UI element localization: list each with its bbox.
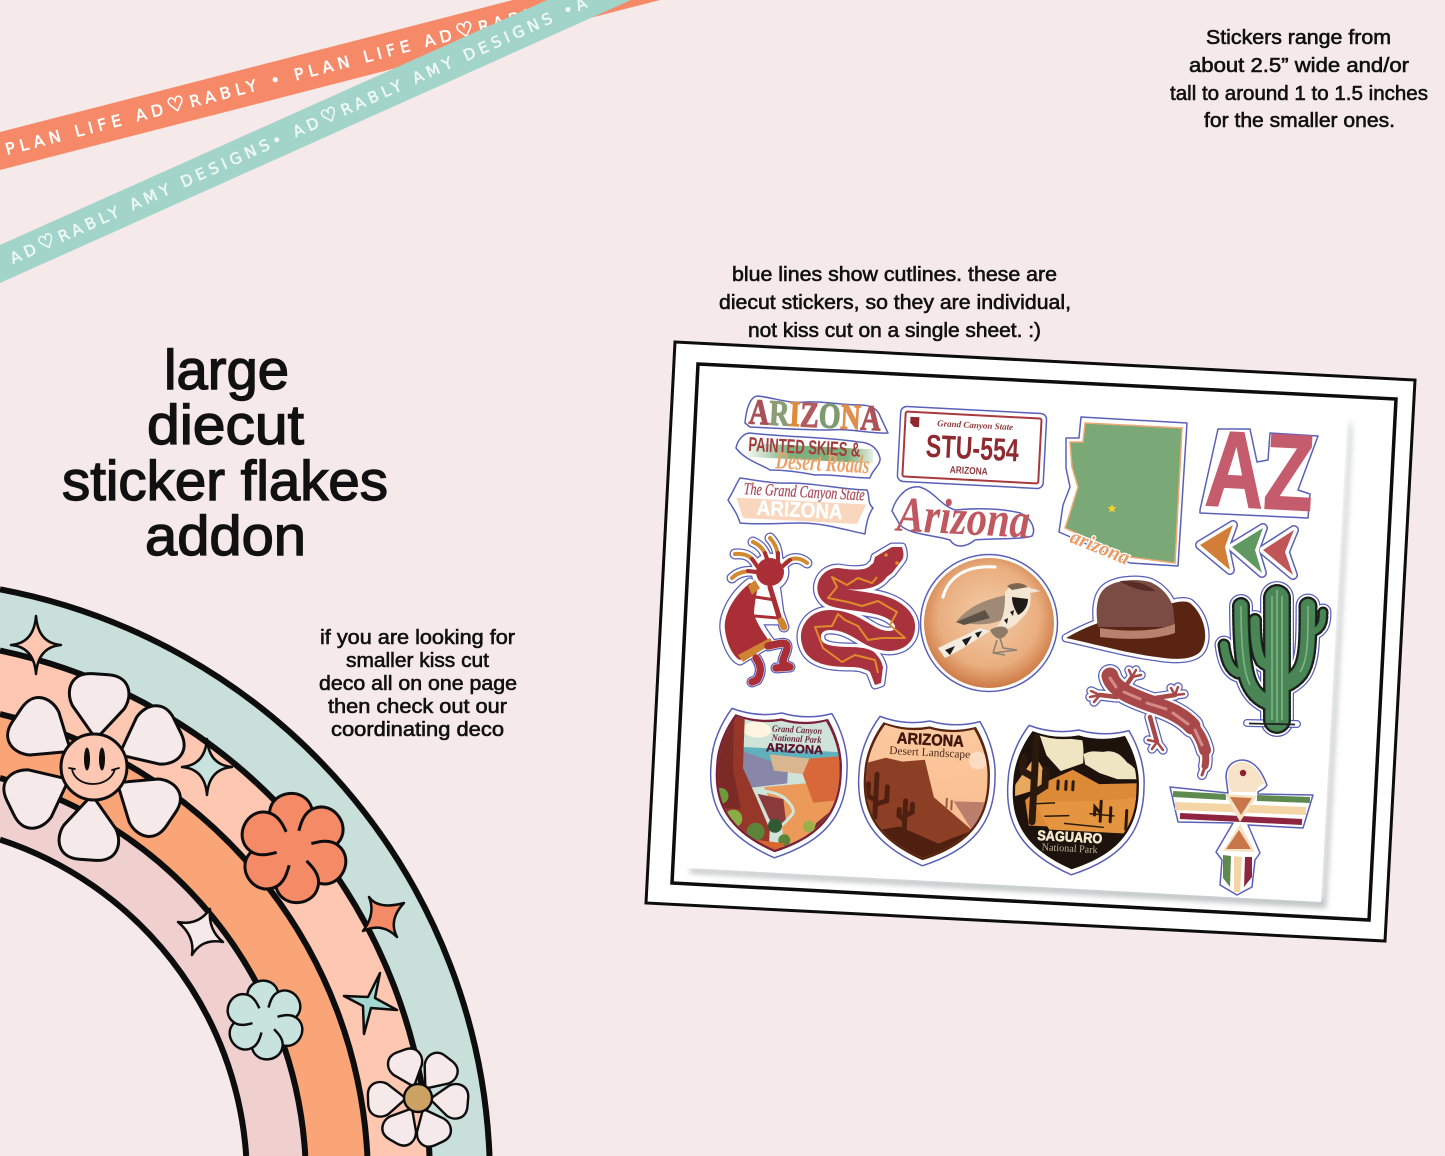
icon: smiley daisy bbox=[0, 672, 191, 862]
icon: peach sparkle bbox=[11, 616, 61, 674]
icon: white star bbox=[178, 909, 223, 955]
sticker: Saguaro National Park shield: National Park bbox=[1041, 842, 1099, 856]
title: diecut bbox=[147, 393, 304, 456]
sticker: thunderbird bbox=[1170, 760, 1313, 895]
title bbox=[62, 338, 388, 567]
sticker: saguaro cactus bbox=[1224, 590, 1323, 724]
sticker: gecko bbox=[1090, 670, 1206, 775]
text: cutlines note bbox=[719, 263, 1071, 342]
icon: bird bbox=[938, 583, 1041, 658]
text: sticker size note bbox=[1170, 26, 1428, 132]
sticker: painted skies and desert roads bbox=[736, 433, 880, 479]
sticker: Grand Canyon shield: Grand Canyon bbox=[772, 725, 822, 737]
sticker: three arrows bbox=[1200, 525, 1294, 575]
sticker: Saguaro National Park shield: SAGUARO bbox=[1037, 827, 1103, 846]
title: sticker flakes bbox=[62, 449, 388, 512]
sticker: license plate bbox=[897, 406, 1047, 489]
icon: small daisy bbox=[367, 1045, 469, 1151]
sticker: license plate: Grand Canyon State bbox=[937, 418, 1013, 432]
sticker: painted skies and desert roads: Desert Roads bbox=[774, 447, 870, 479]
sticker: state of Arizona map: arizona bbox=[1067, 524, 1133, 570]
text: sticker size note: tall to around 1 to 1.5 inches bbox=[1170, 82, 1428, 105]
sticker: the grand canyon state banner: The Grand Canyon State bbox=[743, 479, 865, 504]
sticker: Grand Canyon shield bbox=[704, 707, 852, 864]
text: coordinating deco note: then check out our bbox=[328, 696, 507, 718]
text: cutlines note: diecut stickers, so they are individual, bbox=[719, 291, 1071, 314]
sticker: license plate: ARIZONA bbox=[949, 465, 988, 478]
sticker: rattlesnake bbox=[811, 547, 905, 685]
text: coordinating deco note: deco all on one page bbox=[319, 673, 517, 695]
icon: teal sparkle bbox=[182, 739, 232, 795]
icon: coral flower bbox=[235, 792, 353, 904]
text: coordinating deco note bbox=[319, 627, 517, 741]
sticker: Saguaro National Park shield bbox=[1006, 724, 1145, 876]
sticker: cowboy hat bbox=[1066, 580, 1205, 659]
sticker: Grand Canyon shield: ARIZONA bbox=[766, 740, 824, 757]
text: cutlines note: not kiss cut on a single sheet. :) bbox=[748, 319, 1041, 342]
sticker: meadowlark badge bbox=[920, 554, 1058, 692]
text: sticker size note: about 2.5” wide and/or bbox=[1189, 54, 1409, 77]
text: sticker size note: for the smaller ones. bbox=[1204, 109, 1395, 132]
ribbon: plan life adorably: PLAN LIFE AD♡RABLY • PLAN LIFE AD♡RABLY bbox=[2, 0, 548, 160]
sticker: the grand canyon state banner: ARIZONA bbox=[756, 497, 843, 524]
icon: coral star bbox=[363, 897, 404, 937]
sticker: Grand Canyon shield: National Park bbox=[770, 733, 822, 746]
sticker: Arizona desert landscape shield bbox=[852, 715, 1000, 872]
icon: pale teal flower bbox=[223, 979, 307, 1061]
text: sticker size note: Stickers range from bbox=[1206, 26, 1391, 49]
sticker: license plate: STU-554 bbox=[925, 428, 1020, 468]
sticker: state of Arizona map bbox=[1059, 417, 1187, 570]
text: coordinating deco note: smaller kiss cut bbox=[346, 650, 489, 672]
icon: capital star bbox=[1108, 504, 1116, 512]
sticker: Arizona desert landscape shield: ARIZONA bbox=[896, 730, 965, 751]
rainbow bbox=[0, 589, 490, 1156]
sticker: AZ letters: AZ bbox=[1203, 407, 1317, 534]
text: coordinating deco note: if you are looking for bbox=[320, 627, 515, 649]
icon: aqua star bbox=[344, 973, 397, 1034]
sticker: Arizona desert landscape shield: Desert Landscape bbox=[889, 745, 970, 761]
text: coordinating deco note: coordinating deco bbox=[331, 719, 504, 741]
panel: sticker sheet mockup bbox=[646, 342, 1415, 941]
ribbon: adorably amy designs: AD♡RABLY AMY DESIGNS• AD♡RABLY AMY DESIGNS •A bbox=[6, 0, 590, 269]
sticker: Arizona script: Arizona bbox=[893, 486, 1032, 549]
sticker: ARIZONA lettering: ARIZONA bbox=[748, 392, 882, 438]
sticker: kokopelli bbox=[725, 538, 807, 682]
title: large bbox=[164, 338, 289, 401]
sticker: the grand canyon state banner bbox=[728, 478, 873, 534]
title: addon bbox=[145, 504, 306, 567]
text: cutlines note: blue lines show cutlines. these are bbox=[732, 263, 1057, 286]
sticker: painted skies and desert roads: PAINTED SKIES & bbox=[748, 434, 861, 462]
